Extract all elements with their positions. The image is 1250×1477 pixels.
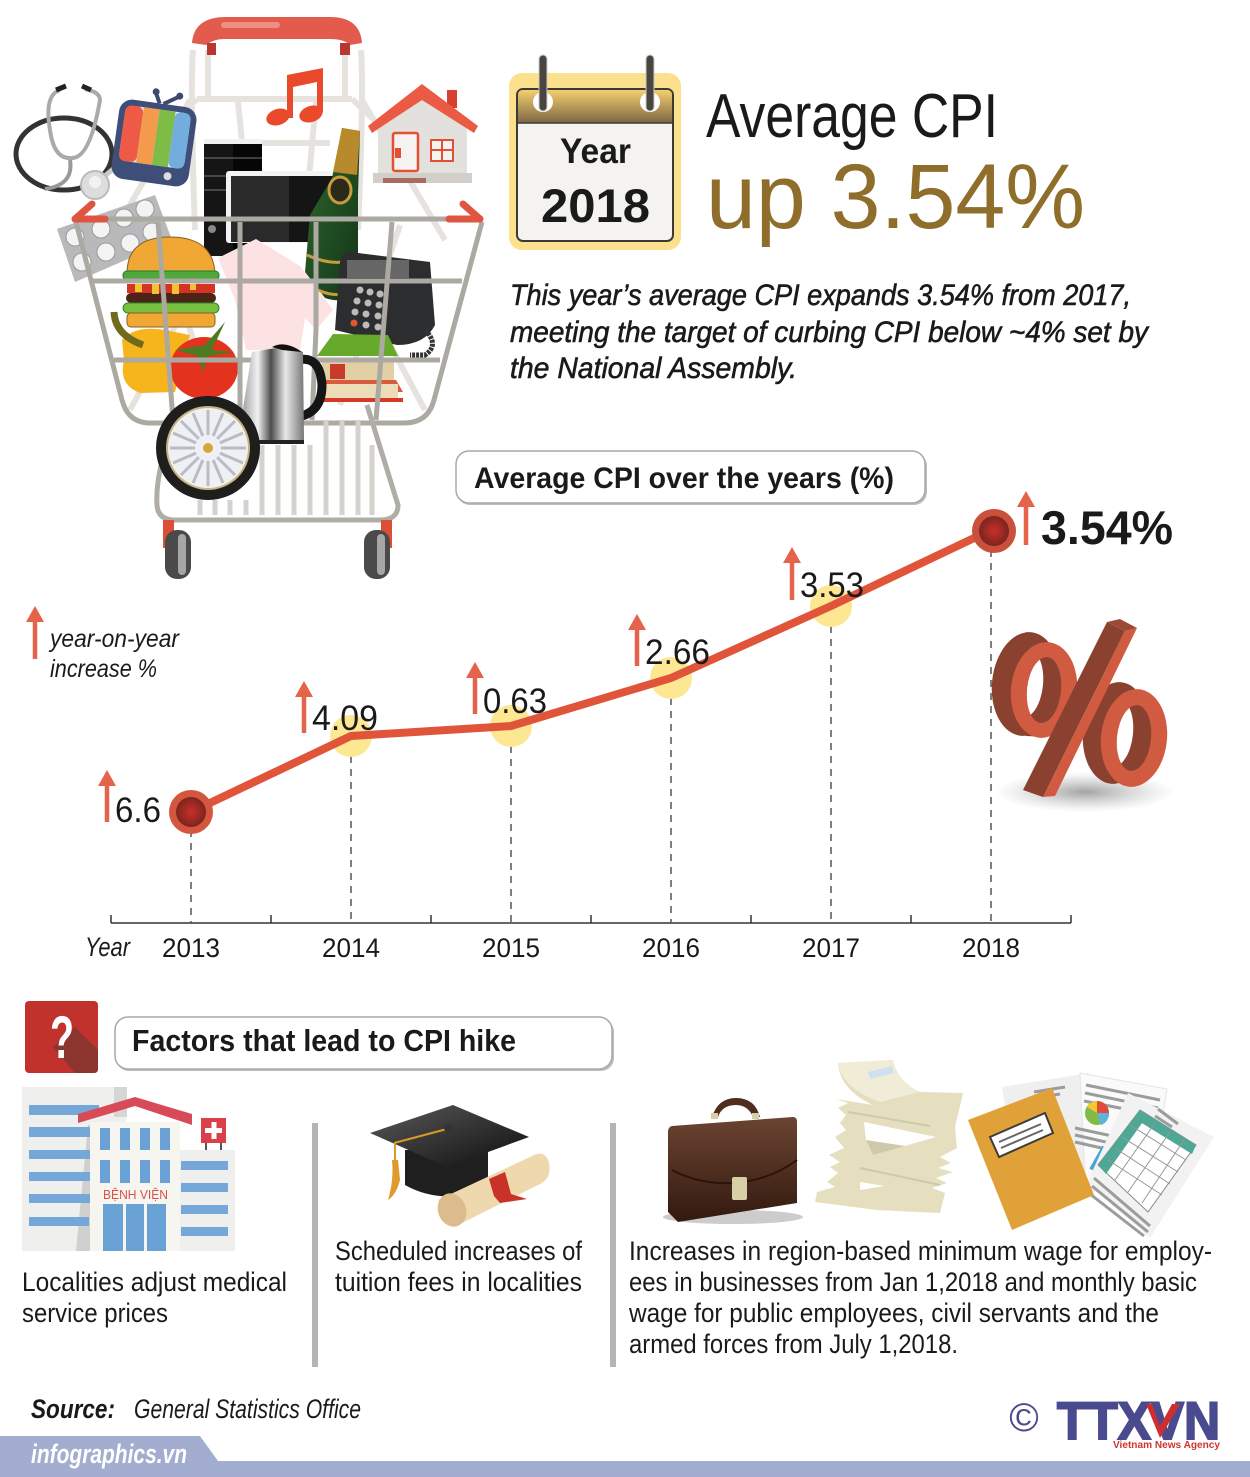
pink shirt <box>218 239 333 350</box>
data labels: 3.53 <box>800 566 864 605</box>
data labels: 6.6 <box>115 791 161 830</box>
axis labels: 2018 <box>962 933 1020 963</box>
chart heading <box>456 451 927 505</box>
television <box>110 84 200 188</box>
pill blister pack <box>57 195 172 282</box>
cart back frame <box>110 50 445 410</box>
intro paragraph: This year’s average CPI expands 3.54% from 2017, <box>510 279 1131 312</box>
divider <box>312 1123 318 1367</box>
icon: briefcase <box>663 1098 803 1224</box>
legend note <box>48 625 181 683</box>
bell pepper <box>114 312 190 393</box>
cart handle <box>192 17 362 55</box>
axis labels <box>85 932 1020 963</box>
stethoscope <box>16 86 118 199</box>
factor text: tuition: Scheduled increases of <box>335 1236 582 1266</box>
icon: folder and documents <box>968 1073 1214 1238</box>
calendar icon: Year 2018 <box>509 55 681 250</box>
cart basket wires <box>72 219 483 423</box>
icon: graduation cap and diploma <box>370 1105 550 1231</box>
data labels <box>115 566 864 830</box>
factors heading <box>115 1017 614 1071</box>
icon: 3D percent sign <box>987 619 1175 812</box>
tyre <box>156 396 260 500</box>
intro paragraph: meeting the target of curbing CPI below ~4% set by <box>510 316 1150 349</box>
factors heading: Factors that lead to CPI hike <box>132 1023 516 1058</box>
factor text: wages: wage for public employees, civil servants and the <box>628 1298 1159 1328</box>
cart corner caps <box>75 204 480 219</box>
factor text: medical: service prices <box>22 1298 168 1328</box>
champagne bottle <box>305 128 360 300</box>
logo: TTXVN: © <box>1009 1396 1039 1440</box>
data labels: 2.66 <box>645 633 710 672</box>
source: Source: <box>31 1394 115 1424</box>
axis labels: 2015 <box>482 933 540 963</box>
axis labels: 2014 <box>322 933 380 963</box>
title: Average CPI <box>706 82 998 151</box>
logo: TTXVN: Vietnam News Agency <box>1113 1440 1220 1451</box>
trend line <box>191 530 991 812</box>
icon: hospital <box>22 1087 235 1251</box>
2018 node <box>972 509 1016 553</box>
intro paragraph <box>510 279 1150 385</box>
chart heading: Average CPI over the years (%) <box>474 462 894 495</box>
calendar label: Year <box>560 132 631 171</box>
factor text: tuition: tuition fees in localities <box>335 1267 582 1297</box>
cart tray <box>157 405 398 520</box>
icon: question mark: ? <box>50 1004 74 1071</box>
factor text: wages: armed forces from July 1,2018. <box>629 1329 958 1359</box>
divider <box>610 1123 616 1367</box>
factor text: medical: Localities adjust medical <box>22 1267 287 1297</box>
books <box>320 362 403 402</box>
arrows <box>26 491 1035 822</box>
house <box>368 84 478 183</box>
data labels: 4.09 <box>312 699 378 738</box>
legend note: increase % <box>50 655 157 683</box>
calendar year: 2018 <box>541 179 650 232</box>
illustration: shopping cart with goods <box>16 17 483 579</box>
icon: hospital: BỆNH VIỆN <box>103 1187 168 1202</box>
intro paragraph: the National Assembly. <box>510 352 797 385</box>
year axis <box>111 915 1071 923</box>
music note <box>264 68 325 128</box>
axis labels: 2013 <box>162 933 220 963</box>
telephone on green base <box>317 252 435 356</box>
cart wheels <box>163 520 392 579</box>
2018 value: 3.54% <box>1041 501 1173 554</box>
headline figure: up 3.54% <box>706 146 1085 248</box>
tomato <box>170 322 238 399</box>
source <box>31 1394 361 1424</box>
footer band: infographics.vn <box>31 1439 187 1469</box>
line chart <box>26 491 1173 963</box>
icon: question mark <box>25 1001 98 1073</box>
burger <box>123 237 219 327</box>
footer band <box>0 1436 1250 1477</box>
factor text: medical <box>22 1267 287 1328</box>
data labels: 0.63 <box>483 682 547 721</box>
factor text: tuition <box>335 1236 582 1297</box>
axis labels: Year <box>85 932 131 962</box>
axis labels: 2017 <box>802 933 860 963</box>
axis labels: 2016 <box>642 933 700 963</box>
icon: paper stack <box>815 1060 963 1213</box>
factor text: wages <box>628 1236 1212 1359</box>
kettle <box>238 344 322 444</box>
computer monitor <box>226 171 334 243</box>
markers <box>330 585 852 757</box>
computer tower <box>204 139 262 257</box>
2013 node <box>169 790 213 834</box>
source: General Statistics Office <box>134 1394 361 1424</box>
legend note: year-on-year <box>48 625 181 653</box>
logo: TTXVN: TTXVN <box>1057 1392 1220 1451</box>
